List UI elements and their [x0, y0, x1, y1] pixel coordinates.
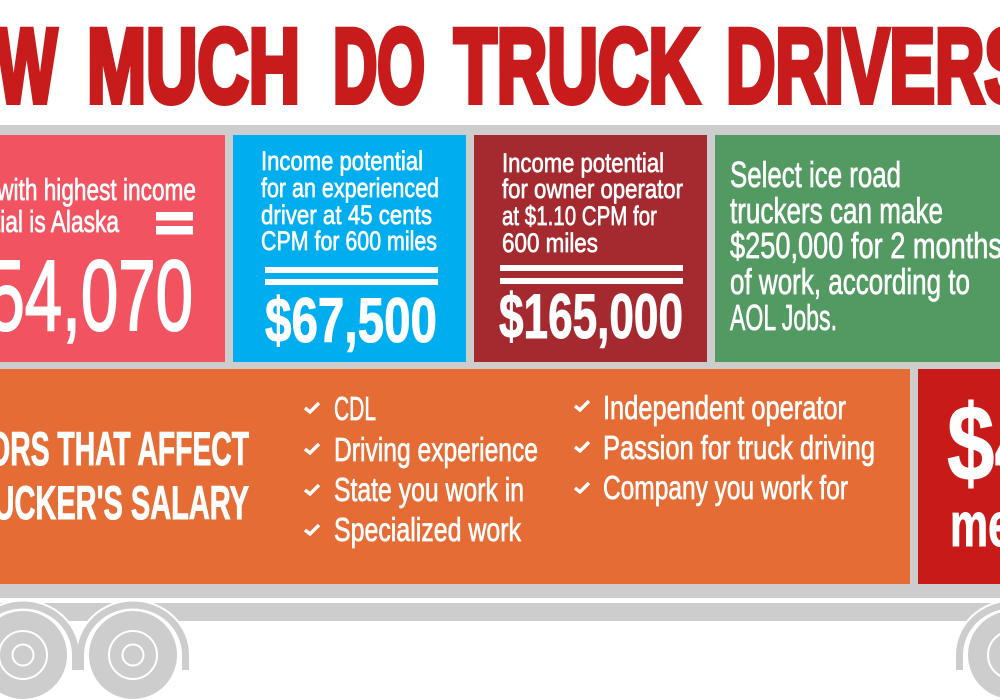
panel: experienced driver income: $67,500 — [265, 286, 437, 356]
factors list: first column: Driving experience — [334, 431, 538, 468]
wheel: rear left — [0, 609, 69, 700]
panel: owner operator income — [474, 135, 707, 362]
factors heading — [0, 422, 249, 529]
factors list: first column: Specialized work — [334, 511, 521, 548]
wheel fenders — [0, 605, 1000, 670]
panel: ice road truckers: AOL Jobs. — [730, 297, 837, 338]
panel: owner operator income: at $1.10 CPM for — [502, 201, 657, 231]
panel: owner operator income: $165,000 — [499, 282, 683, 352]
factors list: second column — [575, 389, 875, 506]
panel: factors affecting salary — [0, 369, 910, 584]
truck trailer body — [0, 125, 1000, 598]
panel: experienced driver income: driver at 45 cents — [261, 200, 432, 230]
trailer underframe bar — [0, 603, 1000, 621]
factors list: second column: Independent operator — [603, 389, 846, 426]
panel: median salary — [918, 369, 1000, 584]
factors list: second column: Company you work for — [603, 469, 848, 506]
factors list: second column: Passion for truck driving — [603, 429, 875, 466]
title — [0, 8, 1000, 125]
factors list: first column: State you work in — [334, 471, 524, 508]
panel: ice road truckers — [715, 135, 1000, 362]
panel: highest income state — [0, 135, 225, 362]
panel: owner operator income: for owner operator — [502, 174, 683, 204]
factors list: first column — [305, 390, 538, 548]
panel: experienced driver income: Income potential — [261, 146, 423, 176]
wheel: front right — [966, 609, 1000, 700]
title: TRUCK — [454, 8, 699, 125]
title: DO — [333, 8, 425, 125]
panel: owner operator income: Income potential — [502, 148, 664, 178]
title: MUCH — [87, 8, 300, 125]
panel: experienced driver income — [233, 135, 466, 362]
panel: experienced driver income: for an experienced — [261, 173, 439, 203]
wheel: rear second — [87, 609, 179, 700]
panel: experienced driver income: CPM for 600 miles — [261, 226, 437, 256]
wheels — [0, 605, 1000, 700]
panel: owner operator income: 600 miles — [502, 228, 598, 258]
panel: ice road truckers: Select ice road — [730, 154, 901, 195]
factors list: first column: CDL — [334, 390, 376, 427]
